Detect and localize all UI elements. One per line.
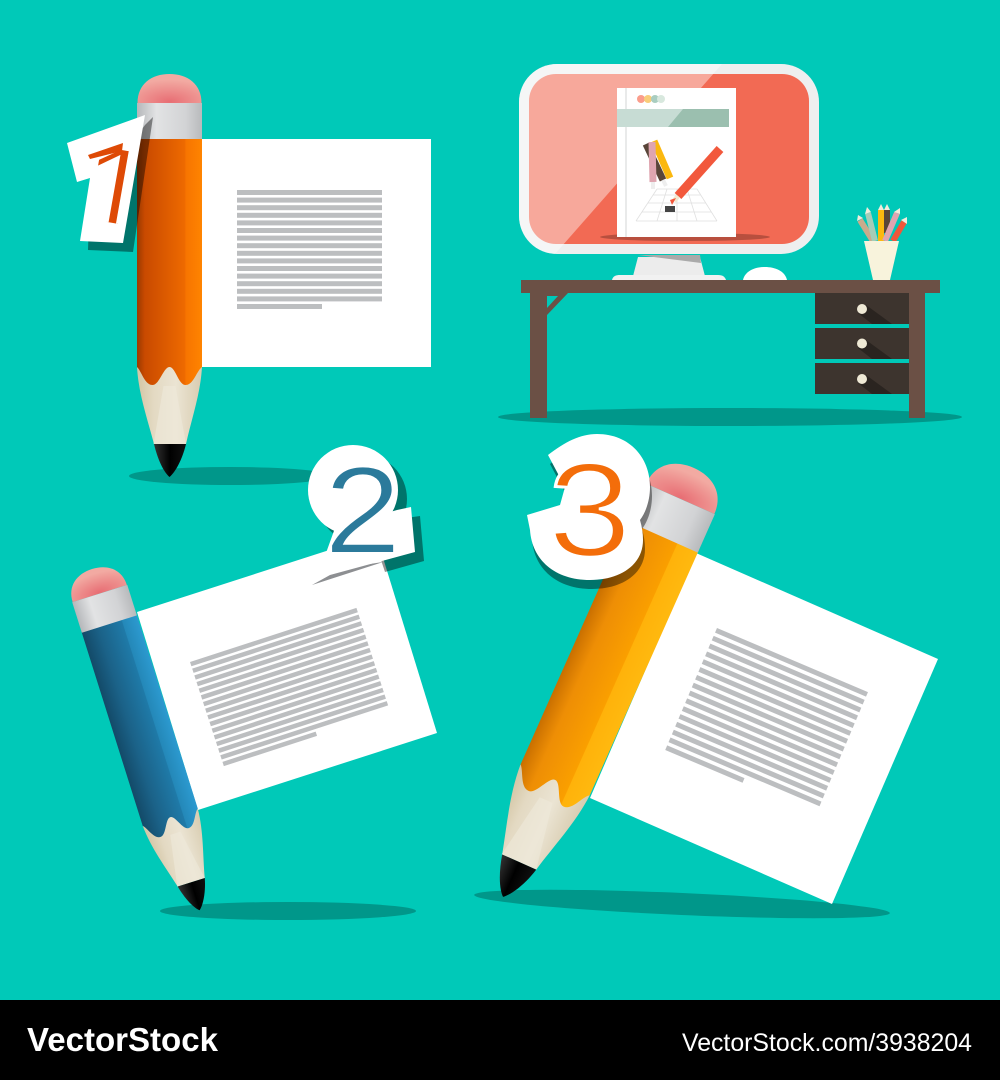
step 1 text lines (237, 190, 382, 309)
footer brand: VectorStock (27, 1021, 219, 1058)
computer monitor (519, 64, 819, 280)
step 2 text lines (190, 608, 390, 766)
step 3 text lines (665, 628, 868, 814)
digit 2: 2 (324, 441, 401, 579)
digit 1: 1 (67, 114, 164, 270)
number 2 badge (308, 441, 424, 585)
panel: step 3 paper (590, 553, 938, 904)
blue pencil (64, 560, 227, 919)
orange pencil (137, 74, 202, 477)
mouse (743, 267, 787, 280)
panel: step 2 paper (137, 535, 437, 810)
desk drawers (815, 293, 909, 394)
document on screen (617, 88, 736, 237)
desk (521, 280, 940, 418)
yellow pencil (468, 453, 729, 912)
number 3 badge (527, 434, 652, 589)
small perspective grid (636, 189, 717, 221)
small pencils (646, 141, 720, 201)
footer bar (0, 1000, 1000, 1080)
digit 3: 3 (548, 435, 631, 585)
number 1 badge (67, 115, 153, 252)
panel: desk with computer (519, 64, 940, 418)
ground shadows (129, 408, 962, 924)
pencil cup (857, 204, 907, 280)
panel: step 1 paper (202, 139, 431, 367)
footer image id: VectorStock.com/3938204 (682, 1030, 972, 1057)
